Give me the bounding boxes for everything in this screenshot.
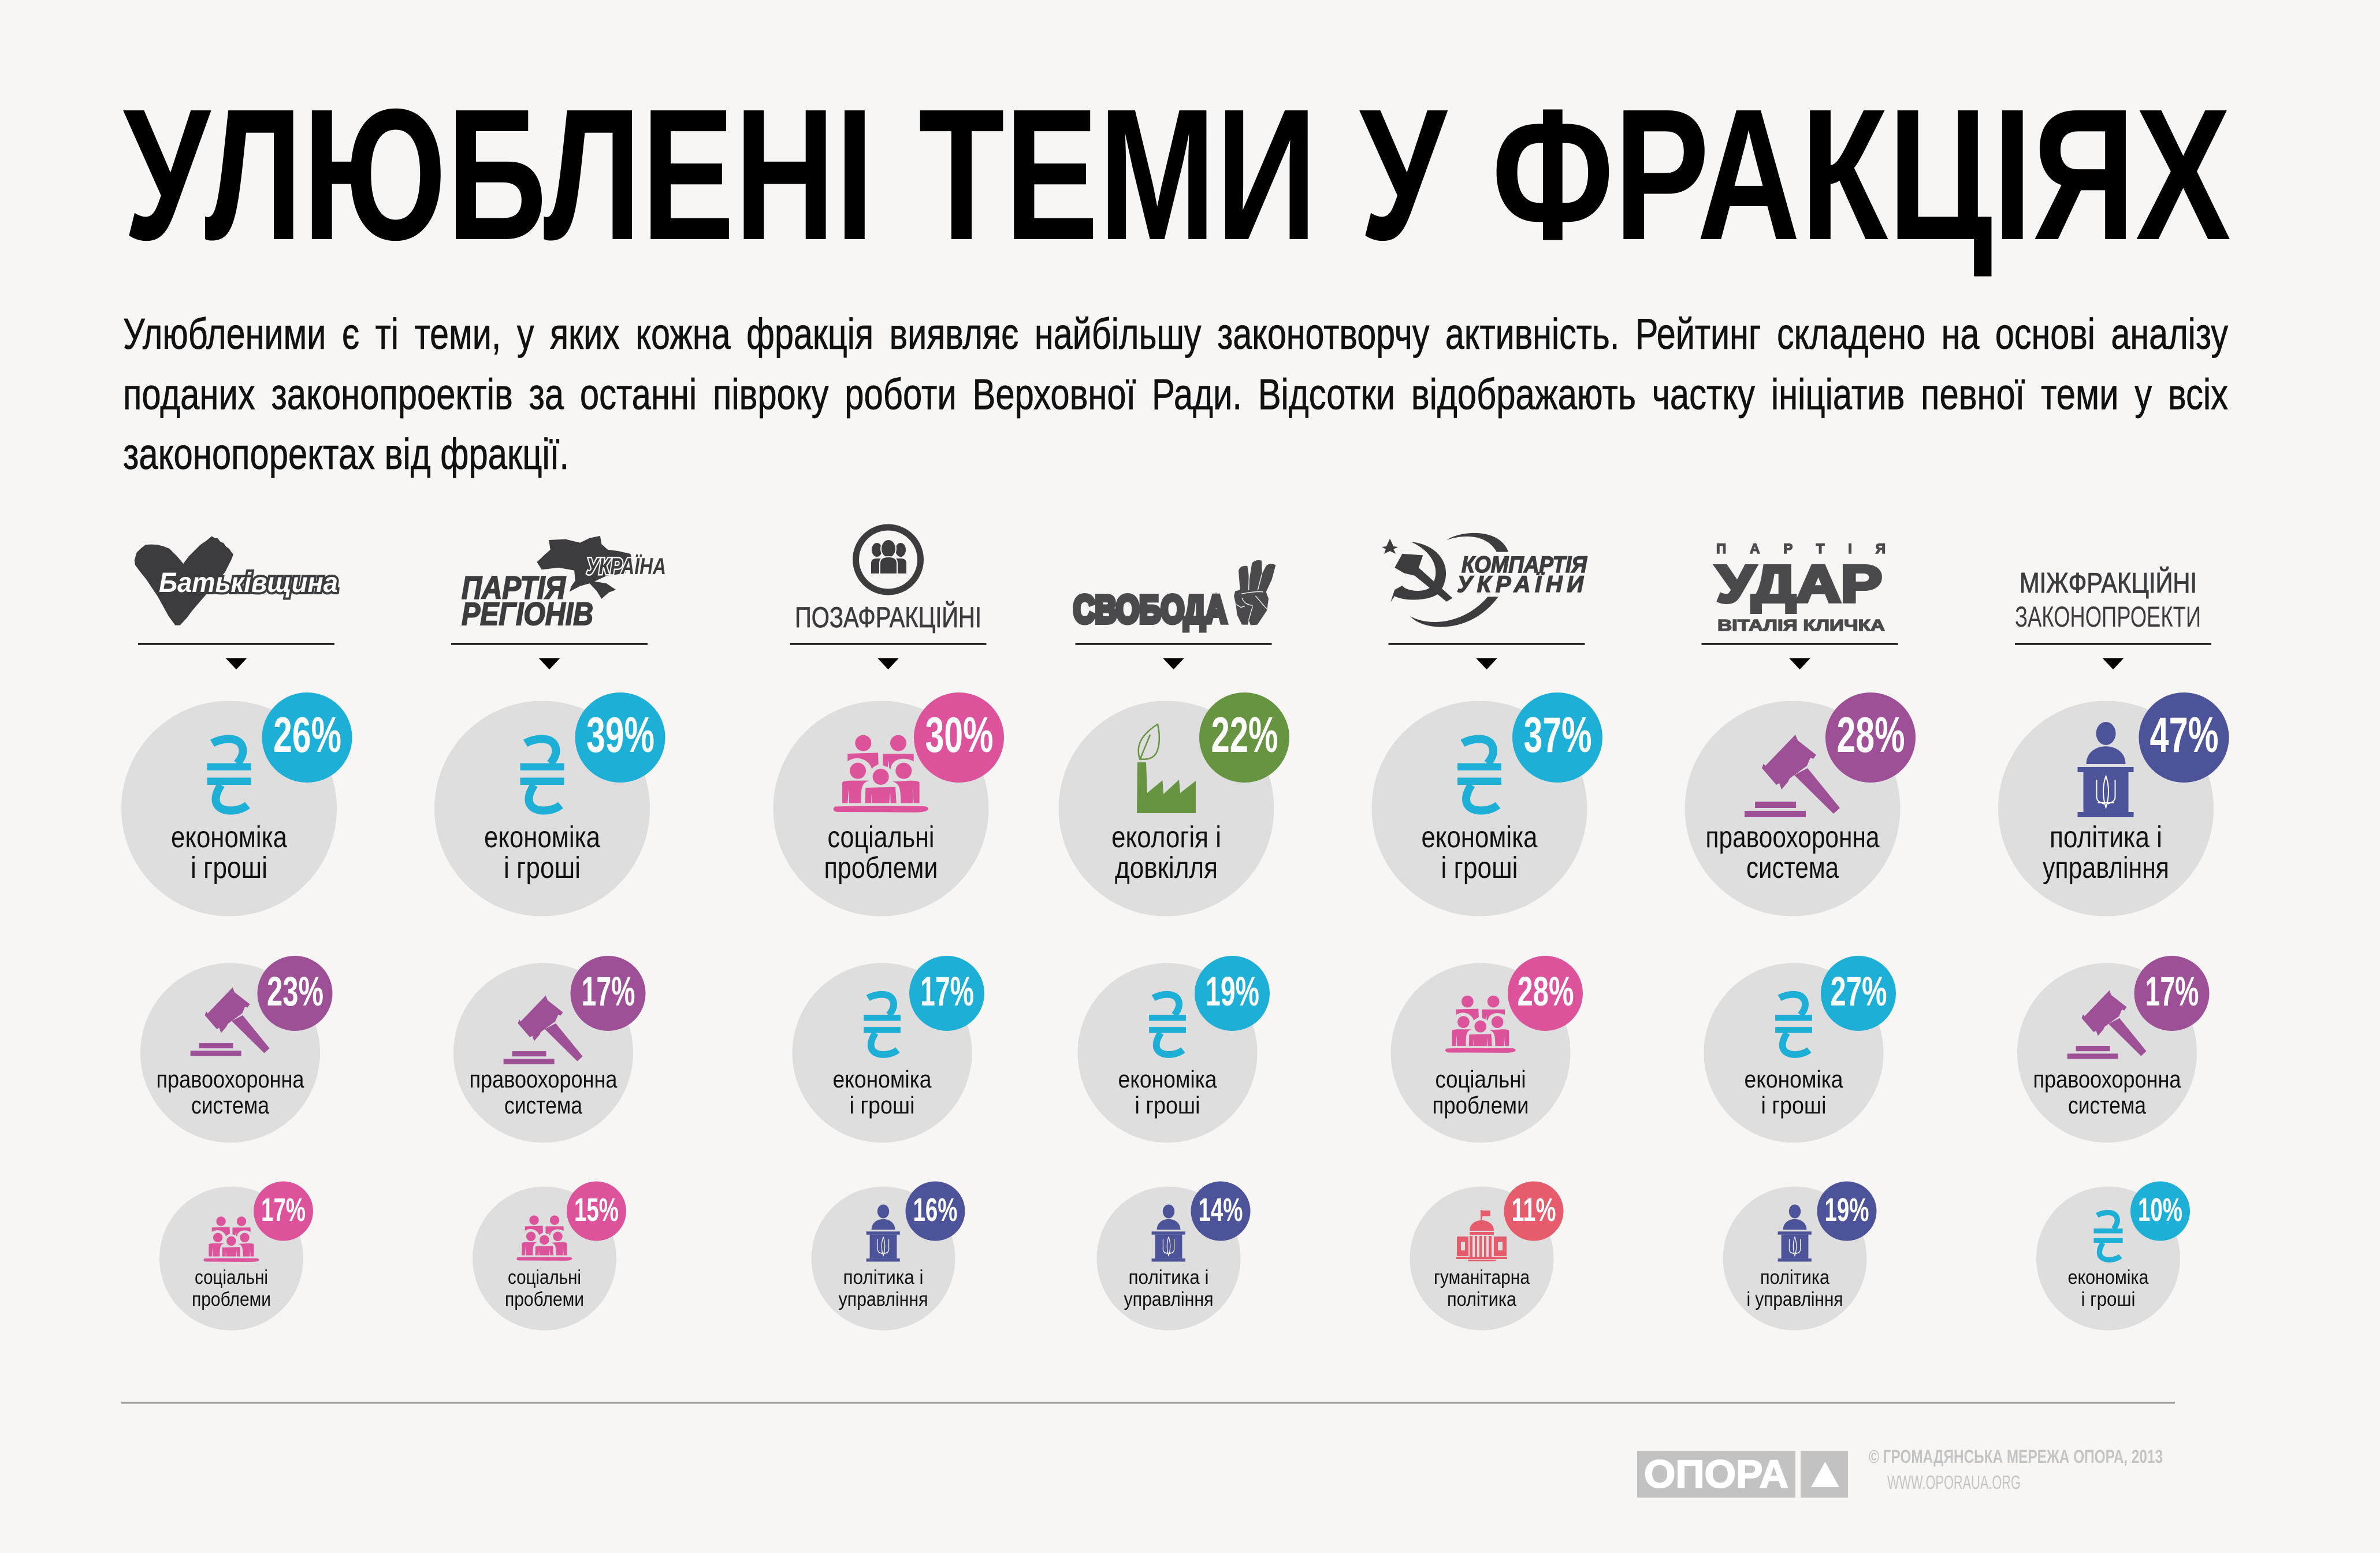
- topic label: [1433, 1066, 1529, 1119]
- topic label: [469, 1066, 618, 1119]
- icon: podium: [1778, 1205, 1812, 1261]
- icon: hryvnia: [1457, 739, 1501, 810]
- copyright text: [1869, 1446, 2163, 1493]
- topic label: політика: [1760, 1267, 1829, 1288]
- topic label: довкілля: [1115, 851, 1218, 885]
- topic label: [833, 1066, 932, 1119]
- topic label: [1747, 1267, 1843, 1310]
- badge: 17%: 17%: [920, 969, 974, 1015]
- icon: factory and leaf: [1137, 724, 1196, 813]
- badge: 15%: [567, 1182, 626, 1241]
- topic label: управління: [839, 1288, 928, 1310]
- badge: 28%: 28%: [1517, 969, 1574, 1015]
- topic label: економіка: [171, 821, 287, 854]
- topic: економіка і гроші 37%: [1371, 692, 1602, 916]
- topic label: соціальні: [827, 821, 935, 854]
- icon: hryvnia: [520, 739, 564, 810]
- badge: 26%: [262, 692, 352, 783]
- topic label: [156, 1066, 304, 1119]
- topic: соціальні проблеми 15%: [473, 1182, 626, 1331]
- topic: гуманітарна політика 11%: [1410, 1182, 1563, 1331]
- badge: 39%: 39%: [586, 707, 654, 763]
- topic label: правоохоронна: [1705, 821, 1880, 854]
- topic: економіка і гроші 17%: [793, 956, 984, 1142]
- title: ТЕМИ: [918, 70, 1317, 279]
- logo: Батьківщина: Батьківщина: [159, 568, 338, 598]
- topic: правоохоронна система 23%: [140, 956, 333, 1142]
- divider and arrow: [2015, 644, 2211, 668]
- badge: 16%: [906, 1182, 965, 1241]
- badge: 19%: [1817, 1182, 1876, 1241]
- divider and arrow: [1702, 644, 1898, 668]
- logo: Позафракційні: [795, 527, 981, 634]
- logo: Компартія України: [1382, 533, 1587, 627]
- topic label: [1705, 821, 1880, 885]
- icon: gavel: [191, 988, 270, 1056]
- badge: 19%: 19%: [1824, 1191, 1869, 1228]
- topic: правоохоронна система 28%: [1684, 692, 1916, 916]
- badge: 28%: [1508, 956, 1583, 1031]
- topic: соціальні проблеми 30%: [773, 692, 1004, 916]
- topic label: гуманітарна: [1434, 1267, 1530, 1288]
- badge: 17%: [2134, 956, 2209, 1031]
- icon: parliament building: [1456, 1210, 1507, 1261]
- badge: 27%: 27%: [1830, 969, 1887, 1015]
- badge: 30%: [914, 692, 1004, 783]
- logo: Партія регіонів: РЕГІОНІВ: [462, 595, 593, 632]
- topic label: [1111, 821, 1221, 885]
- topic label: [1745, 1066, 1843, 1119]
- icon: gavel: [2067, 990, 2147, 1059]
- badge: 47%: 47%: [2150, 707, 2218, 763]
- badge: 19%: [1195, 956, 1270, 1031]
- icon: hryvnia: [207, 739, 251, 810]
- logo: Міжфракційні законопроекти: ЗАКОНОПРОЕКТИ: [2015, 601, 2201, 633]
- badge: 26%: 26%: [273, 707, 341, 763]
- logo: Партія регіонів: ПАРТІЯ: [462, 569, 566, 605]
- footer logo: ОПОРА: ОПОРА: [1644, 1452, 1788, 1496]
- logo: Свобода: СВОБОДА: [1073, 588, 1227, 631]
- logo: Батьківщина: [135, 536, 338, 625]
- topic label: проблеми: [505, 1288, 584, 1310]
- topic label: [1421, 821, 1538, 885]
- title: У: [1359, 70, 1449, 279]
- icon: podium: [1152, 1205, 1185, 1261]
- logo: Компартія України: КОМПАРТІЯ: [1462, 552, 1587, 578]
- topic label: економіка: [833, 1066, 932, 1093]
- badge: 17%: [254, 1182, 313, 1241]
- logo: Удар: ПАРТІЯ: [1716, 541, 1886, 557]
- badge: 17%: [909, 956, 984, 1031]
- topic: економіка і гроші 19%: [1078, 956, 1270, 1142]
- column: Удар: [1684, 541, 1916, 1331]
- badge: 37%: 37%: [1524, 707, 1592, 763]
- logo: Позафракційні: ПОЗАФРАКЦІЙНІ: [795, 601, 981, 634]
- topic label: і гроші: [191, 851, 267, 885]
- badge: 15%: 15%: [574, 1191, 619, 1228]
- divider and arrow: [451, 644, 648, 668]
- topic label: [839, 1267, 928, 1310]
- divider and arrow: [1076, 644, 1272, 668]
- icon: gavel: [1745, 735, 1840, 817]
- topic label: і управління: [1747, 1288, 1843, 1310]
- topic label: і гроші: [504, 851, 581, 885]
- topic label: і гроші: [1761, 1092, 1827, 1119]
- logo: Удар: [1716, 541, 1886, 634]
- topic label: правоохоронна: [2033, 1066, 2181, 1093]
- icon: people: [516, 1216, 572, 1261]
- topic label: економіка: [2068, 1267, 2149, 1288]
- icon: hryvnia: [1775, 995, 1812, 1055]
- topic label: і гроші: [1441, 851, 1518, 885]
- topic label: система: [191, 1092, 270, 1119]
- topic label: [2068, 1267, 2149, 1310]
- icon: gavel: [504, 996, 583, 1064]
- badge: 10%: 10%: [2138, 1191, 2182, 1228]
- column: Міжфракційні законопроекти: [1998, 567, 2229, 1331]
- badge: 28%: 28%: [1837, 707, 1905, 763]
- topic label: [1118, 1066, 1217, 1119]
- topic: правоохоронна система 17%: [2017, 956, 2209, 1142]
- topic label: політика: [1447, 1288, 1516, 1310]
- badge: 17%: 17%: [2145, 969, 2199, 1015]
- icon: hryvnia: [864, 995, 901, 1055]
- intro paragraph: законопоректах від фракції.: [123, 430, 569, 478]
- icon: podium: [867, 1205, 900, 1261]
- icon: people: [1445, 996, 1516, 1053]
- title: [123, 70, 2232, 279]
- badge: 47%: [2139, 692, 2229, 783]
- badge: 10%: [2130, 1182, 2190, 1241]
- topic label: політика і: [1129, 1267, 1208, 1288]
- topic label: [192, 1267, 271, 1310]
- footer logo: ОПОРА: [1637, 1451, 1848, 1498]
- topic label: і гроші: [849, 1092, 915, 1119]
- icon: people: [203, 1217, 259, 1262]
- badge: 22%: 22%: [1211, 707, 1278, 763]
- column: Компартія України: [1371, 533, 1602, 1330]
- badge: 39%: [575, 692, 665, 783]
- badge: 11%: 11%: [1511, 1191, 1556, 1228]
- topic label: [824, 821, 938, 885]
- topic label: і гроші: [2081, 1288, 2135, 1310]
- topic label: і гроші: [1135, 1092, 1200, 1119]
- topic label: екологія і: [1111, 821, 1221, 854]
- topic label: [171, 821, 287, 885]
- logo: Партія регіонів: УКРАЇНА: [586, 554, 666, 579]
- topic label: [1434, 1267, 1530, 1310]
- topic: політика і управління 16%: [811, 1182, 965, 1331]
- topic label: система: [504, 1092, 583, 1119]
- logo: Міжфракційні законопроекти: [2015, 567, 2201, 633]
- topic label: проблеми: [1433, 1092, 1529, 1119]
- divider and arrow: [1389, 644, 1585, 668]
- topic label: соціальні: [195, 1267, 268, 1288]
- topic label: правоохоронна: [156, 1066, 304, 1093]
- icon: podium: [2077, 722, 2134, 817]
- column: Батьківщина: [121, 536, 352, 1331]
- badge: 27%: [1821, 956, 1896, 1031]
- topic label: [1124, 1267, 1213, 1310]
- logo: Свобода: [1073, 560, 1275, 631]
- topic label: [505, 1267, 584, 1310]
- badge: 16%: 16%: [913, 1191, 958, 1228]
- badge: 17%: 17%: [261, 1191, 306, 1228]
- column: Свобода: [1058, 560, 1289, 1331]
- topic: політика і управління 47%: [1998, 692, 2229, 916]
- topic label: політика і: [2050, 821, 2162, 854]
- badge: 23%: 23%: [267, 969, 323, 1015]
- topic label: економіка: [1118, 1066, 1217, 1093]
- icon: hryvnia: [2093, 1212, 2123, 1260]
- topic label: соціальні: [1435, 1066, 1526, 1093]
- topic label: економіка: [1745, 1066, 1843, 1093]
- icon: hryvnia: [1149, 995, 1186, 1055]
- copyright text: WWW.OPORAUA.ORG: [1887, 1472, 2021, 1493]
- logo: Партія регіонів: [462, 536, 666, 632]
- topic: правоохоронна система 17%: [453, 956, 646, 1142]
- icon: people: [834, 735, 928, 813]
- topic: економіка і гроші 27%: [1704, 956, 1896, 1142]
- logo: Компартія України: УКРАЇНИ: [1457, 572, 1584, 597]
- topic: соціальні проблеми 17%: [159, 1182, 313, 1331]
- topic label: проблеми: [192, 1288, 271, 1310]
- topic label: управління: [2043, 851, 2169, 885]
- badge: 23%: [258, 956, 333, 1031]
- logo: Міжфракційні законопроекти: МІЖФРАКЦІЙНІ: [2020, 567, 2197, 599]
- badge: 30%: 30%: [925, 707, 994, 763]
- topic label: [2033, 1066, 2181, 1119]
- badge: 17%: [571, 956, 646, 1031]
- topic: політика і управління 14%: [1096, 1182, 1250, 1331]
- intro paragraph: [123, 310, 2228, 478]
- logo: Удар: ВІТАЛІЯ КЛИЧКА: [1717, 616, 1885, 634]
- topic label: економіка: [1421, 821, 1538, 854]
- topic label: проблеми: [824, 851, 938, 885]
- topic label: [2043, 821, 2169, 885]
- badge: 28%: [1825, 692, 1916, 783]
- badge: 19%: 19%: [1206, 969, 1259, 1015]
- topic: соціальні проблеми 28%: [1391, 956, 1583, 1142]
- column: Партія регіонів: [434, 536, 666, 1330]
- topic: екологія і довкілля 22%: [1058, 692, 1289, 916]
- topic label: управління: [1124, 1288, 1213, 1310]
- topic: економіка і гроші 10%: [2036, 1182, 2190, 1331]
- topic: економіка і гроші 26%: [121, 692, 352, 916]
- divider and arrow: [138, 644, 334, 668]
- topic label: політика і: [843, 1267, 923, 1288]
- topic: політика і управління 19%: [1723, 1182, 1876, 1331]
- topic: економіка і гроші 39%: [434, 692, 665, 916]
- title: УЛЮБЛЕНІ: [123, 70, 874, 279]
- badge: 14%: [1191, 1182, 1250, 1241]
- topic label: [484, 821, 600, 885]
- topic label: система: [2068, 1092, 2147, 1119]
- topic label: правоохоронна: [469, 1066, 618, 1093]
- badge: 17%: 17%: [581, 969, 635, 1015]
- column: Позафракційні: [773, 527, 1004, 1331]
- logo: Удар: УДАР: [1716, 556, 1882, 613]
- badge: 22%: [1199, 692, 1289, 783]
- copyright text: © ГРОМАДЯНСЬКА МЕРЕЖА ОПОРА, 2013: [1869, 1446, 2163, 1467]
- badge: 11%: [1504, 1182, 1563, 1241]
- topic label: економіка: [484, 821, 600, 854]
- badge: 37%: [1512, 692, 1602, 783]
- badge: 14%: 14%: [1198, 1191, 1243, 1228]
- divider and arrow: [790, 644, 987, 668]
- topic label: система: [1746, 851, 1839, 885]
- topic label: соціальні: [508, 1267, 581, 1288]
